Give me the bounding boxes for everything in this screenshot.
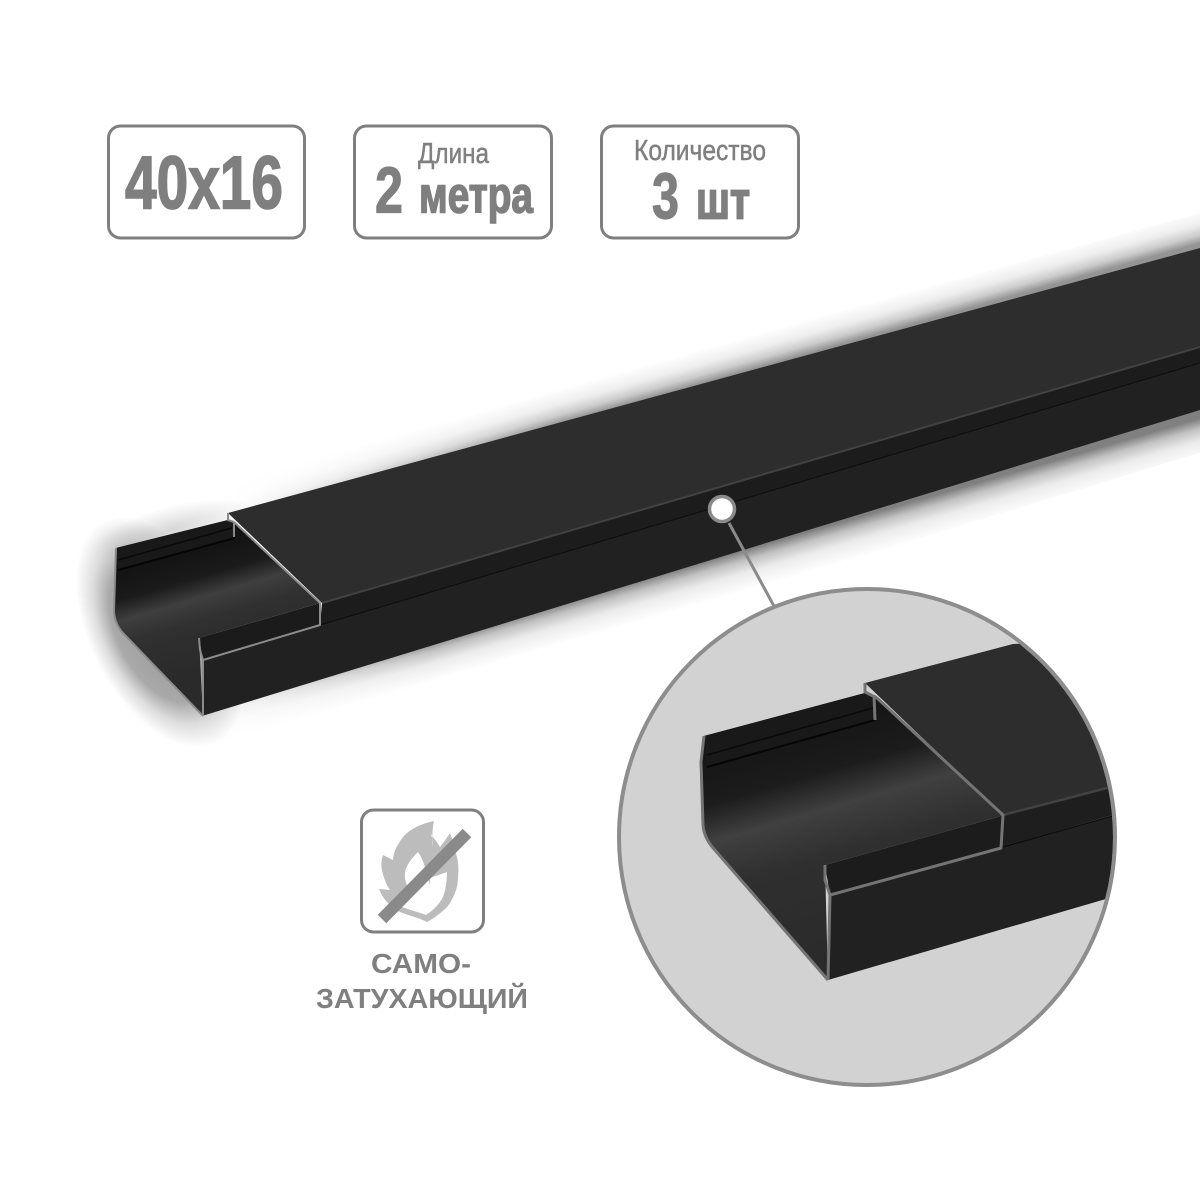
duct outline strokes	[114, 513, 320, 716]
main cable duct	[41, 213, 1200, 775]
callout: marker dot	[710, 496, 734, 522]
label: self-extinguishing: САМО-	[371, 948, 471, 979]
badge: size 40x16	[108, 126, 304, 238]
label: self-extinguishing	[316, 948, 528, 1014]
zoomed cover top	[865, 644, 1108, 814]
badge: length 2 metres: 2	[375, 154, 403, 226]
strike-through bar	[382, 833, 467, 919]
cover seam	[320, 363, 1200, 625]
duct front inner lip	[199, 603, 320, 660]
badge: length 2 metres: метра	[419, 166, 533, 224]
flame	[379, 821, 458, 922]
duct open channel floor	[114, 520, 320, 716]
badge: quantity 3 pcs: шт	[696, 172, 750, 230]
lens background	[619, 589, 1115, 1085]
zoomed duct	[701, 640, 1130, 980]
duct body: side wall	[202, 363, 1200, 716]
badge: length 2 metres: Длина	[418, 138, 490, 170]
duct cover top	[228, 248, 1200, 603]
badge: quantity 3 pcs: 3	[652, 160, 679, 232]
badge: size 40x16: 40x16	[125, 140, 283, 224]
duct shadow	[41, 213, 1200, 775]
zoomed front lip	[825, 815, 1003, 895]
callout: leader line	[729, 523, 775, 608]
duct back inner lip	[116, 520, 235, 570]
duct cover front lip	[320, 347, 1200, 625]
badge: quantity 3 pcs: Количество	[634, 135, 766, 167]
zoomed back lip	[704, 693, 864, 736]
zoomed cover front lip	[1002, 788, 1112, 847]
zoomed side wall	[828, 810, 1130, 980]
zoomed channel floor	[701, 693, 1003, 980]
badge: quantity 3 pcs	[602, 126, 798, 238]
badge: length 2 metres	[354, 126, 552, 238]
cover edge highlight	[322, 347, 1200, 603]
icon: self-extinguishing flame	[362, 810, 484, 932]
zoomed outlines	[701, 683, 1003, 980]
label: self-extinguishing: ЗАТУХАЮЩИЙ	[316, 982, 528, 1014]
back lip groove	[118, 538, 235, 570]
zoomed detail lens	[619, 589, 1130, 1085]
